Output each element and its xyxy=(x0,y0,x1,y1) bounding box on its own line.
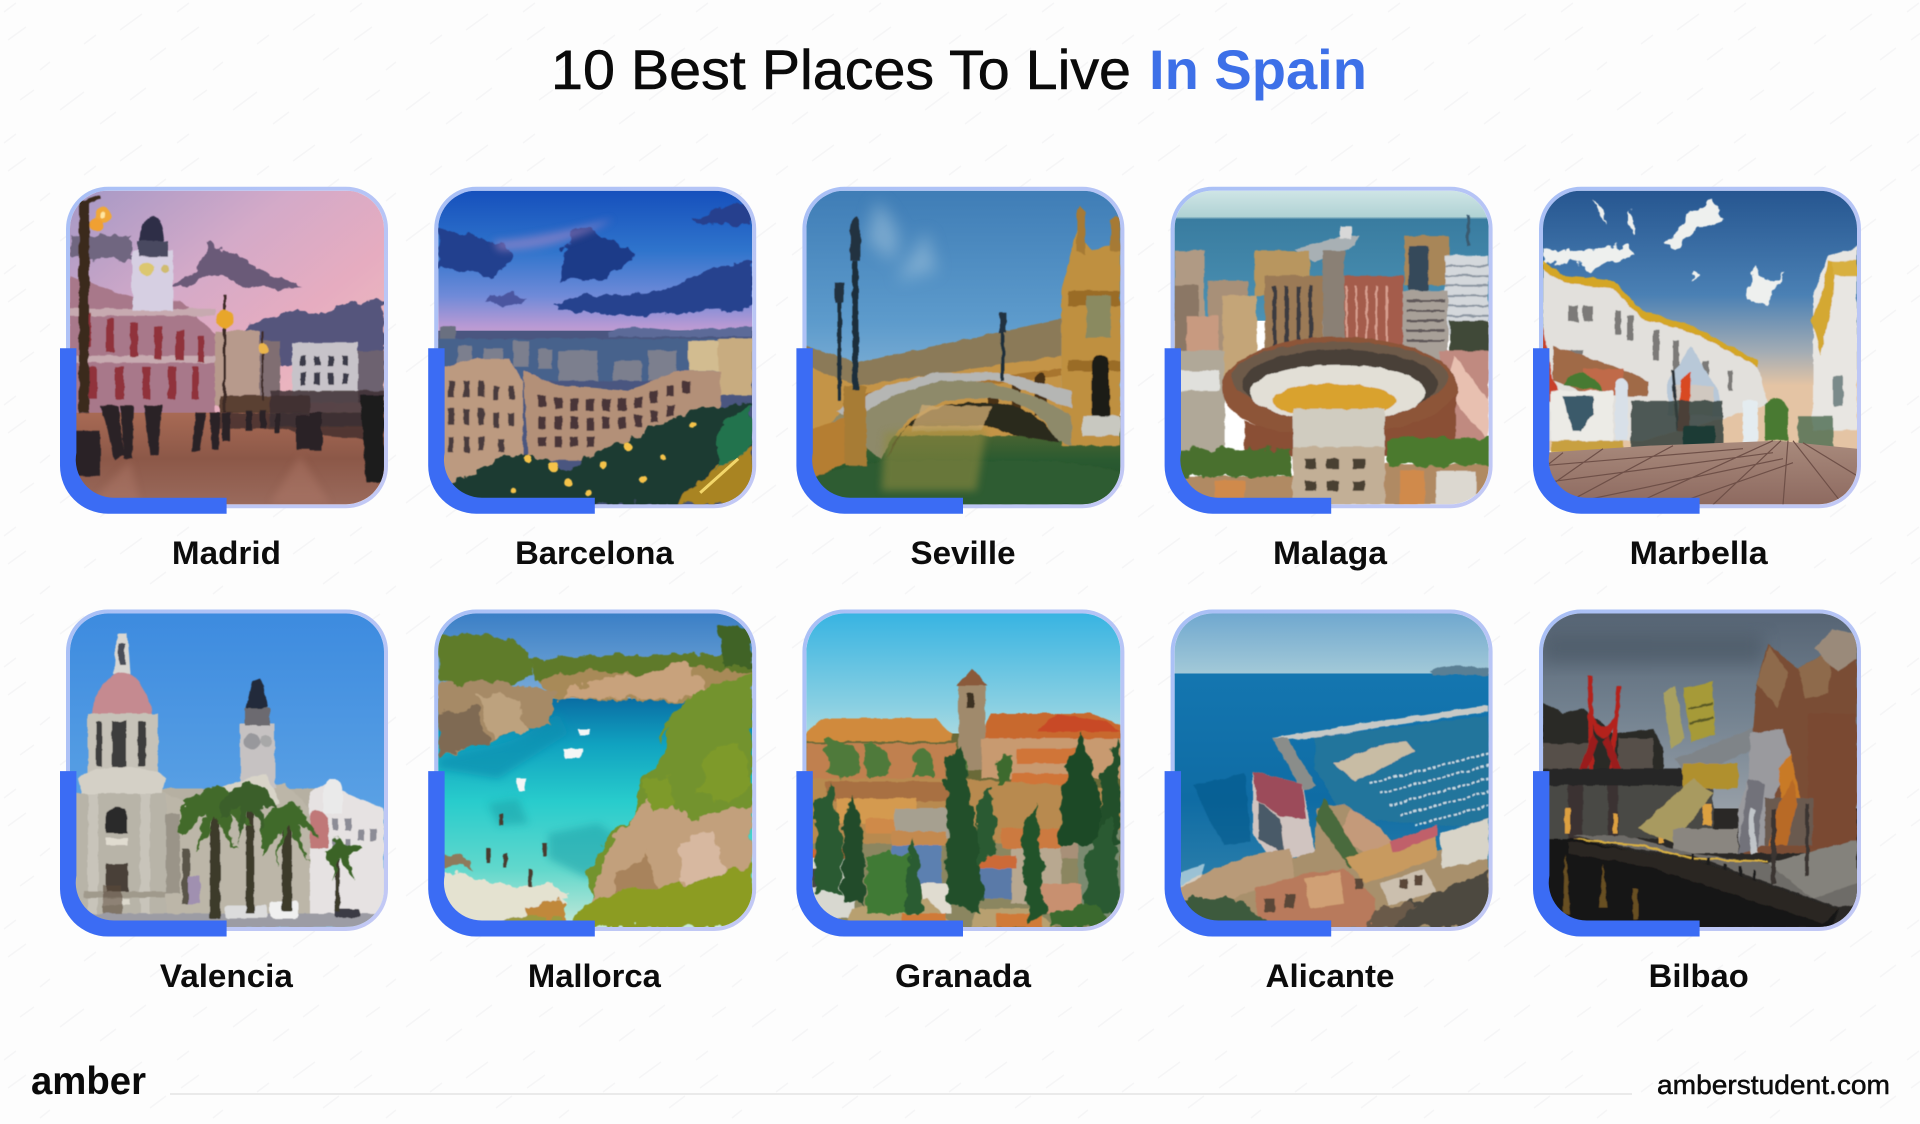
photo: Mallorca cove xyxy=(438,614,752,928)
frame: Granada xyxy=(804,612,1122,929)
palms xyxy=(182,784,362,882)
frame: Marbella xyxy=(1541,189,1859,506)
card: Mallorca xyxy=(428,612,754,936)
card: Seville xyxy=(796,189,1122,514)
frame: Bilbao xyxy=(1541,612,1859,929)
plaza ground xyxy=(70,413,384,505)
frame: Valencia xyxy=(68,612,386,929)
label: Madrid: Madrid xyxy=(172,535,281,571)
photo: Bilbao Guggenheim at dusk xyxy=(1543,614,1857,928)
card: Madrid xyxy=(60,189,386,514)
title: In Spain xyxy=(1149,38,1367,101)
label: Bilbao: Bilbao xyxy=(1649,958,1749,994)
label: Mallorca: Mallorca xyxy=(528,958,661,994)
photo: Valencia city hall xyxy=(70,614,384,928)
red arch xyxy=(1588,676,1621,774)
label: Malaga: Malaga xyxy=(1273,535,1387,571)
card: Alicante xyxy=(1165,612,1491,936)
label: Valencia: Valencia xyxy=(160,958,293,994)
accent bracket: Alicante xyxy=(1165,771,1331,936)
promenade xyxy=(1573,836,1857,908)
bridge arch xyxy=(816,464,1120,504)
water and wall xyxy=(1543,838,1838,928)
photo: Malaga bullring and port xyxy=(1171,191,1493,505)
card: Bilbao xyxy=(1533,612,1859,936)
accent bracket: Mallorca xyxy=(428,771,595,936)
frame: Mallorca xyxy=(436,612,754,929)
frame: Barcelona xyxy=(436,189,754,506)
accent bracket: Seville xyxy=(796,348,963,514)
label: Barcelona: Barcelona xyxy=(515,535,674,571)
label: Marbella: Marbella xyxy=(1630,535,1768,571)
hotel and town xyxy=(1232,803,1489,927)
photo: Barcelona skyline at dusk xyxy=(438,191,752,505)
label: Granada: Granada xyxy=(895,958,1031,994)
frame: Alicante xyxy=(1173,612,1491,929)
accent bracket: Barcelona xyxy=(428,348,595,514)
frame: Malaga xyxy=(1173,189,1491,506)
accent bracket: Madrid xyxy=(60,348,227,514)
photo: Marbella promenade xyxy=(1543,191,1857,505)
card: Granada xyxy=(796,612,1122,936)
big domed tower xyxy=(114,634,130,674)
right cliff xyxy=(584,672,752,900)
accent bracket: Marbella xyxy=(1533,348,1700,514)
card: Barcelona xyxy=(428,189,754,514)
photo: Granada hillside town xyxy=(806,614,1120,928)
accent bracket: Granada xyxy=(796,771,963,936)
card: Valencia xyxy=(60,612,386,936)
palm trunks xyxy=(208,810,342,920)
breakwater xyxy=(1273,706,1489,740)
title xyxy=(551,38,1367,101)
beach and bushes xyxy=(444,869,570,920)
photo: Madrid plaza at dusk xyxy=(70,191,384,505)
label: Seville: Seville xyxy=(910,535,1016,571)
guggenheim xyxy=(1743,634,1857,854)
photo: Plaza de Espana, Seville xyxy=(806,191,1120,506)
boats and swimmers xyxy=(486,728,590,886)
accent bracket: Bilbao xyxy=(1533,771,1700,936)
logo: amber: amber xyxy=(31,1060,146,1103)
label: Alicante: Alicante xyxy=(1266,958,1394,994)
accent bracket: Malaga xyxy=(1165,348,1331,514)
post office building xyxy=(70,217,384,416)
website: amberstudent.com: amberstudent.com xyxy=(1657,1070,1890,1100)
accent bracket: Valencia xyxy=(60,771,227,936)
card: Malaga xyxy=(1165,189,1493,514)
frame: Madrid xyxy=(68,189,386,506)
title: 10 Best Places To Live xyxy=(551,38,1131,101)
photo: Alicante harbour xyxy=(1175,614,1489,928)
bull ring xyxy=(1222,337,1458,441)
frame: Seville xyxy=(804,189,1122,506)
card: Marbella xyxy=(1533,189,1859,514)
